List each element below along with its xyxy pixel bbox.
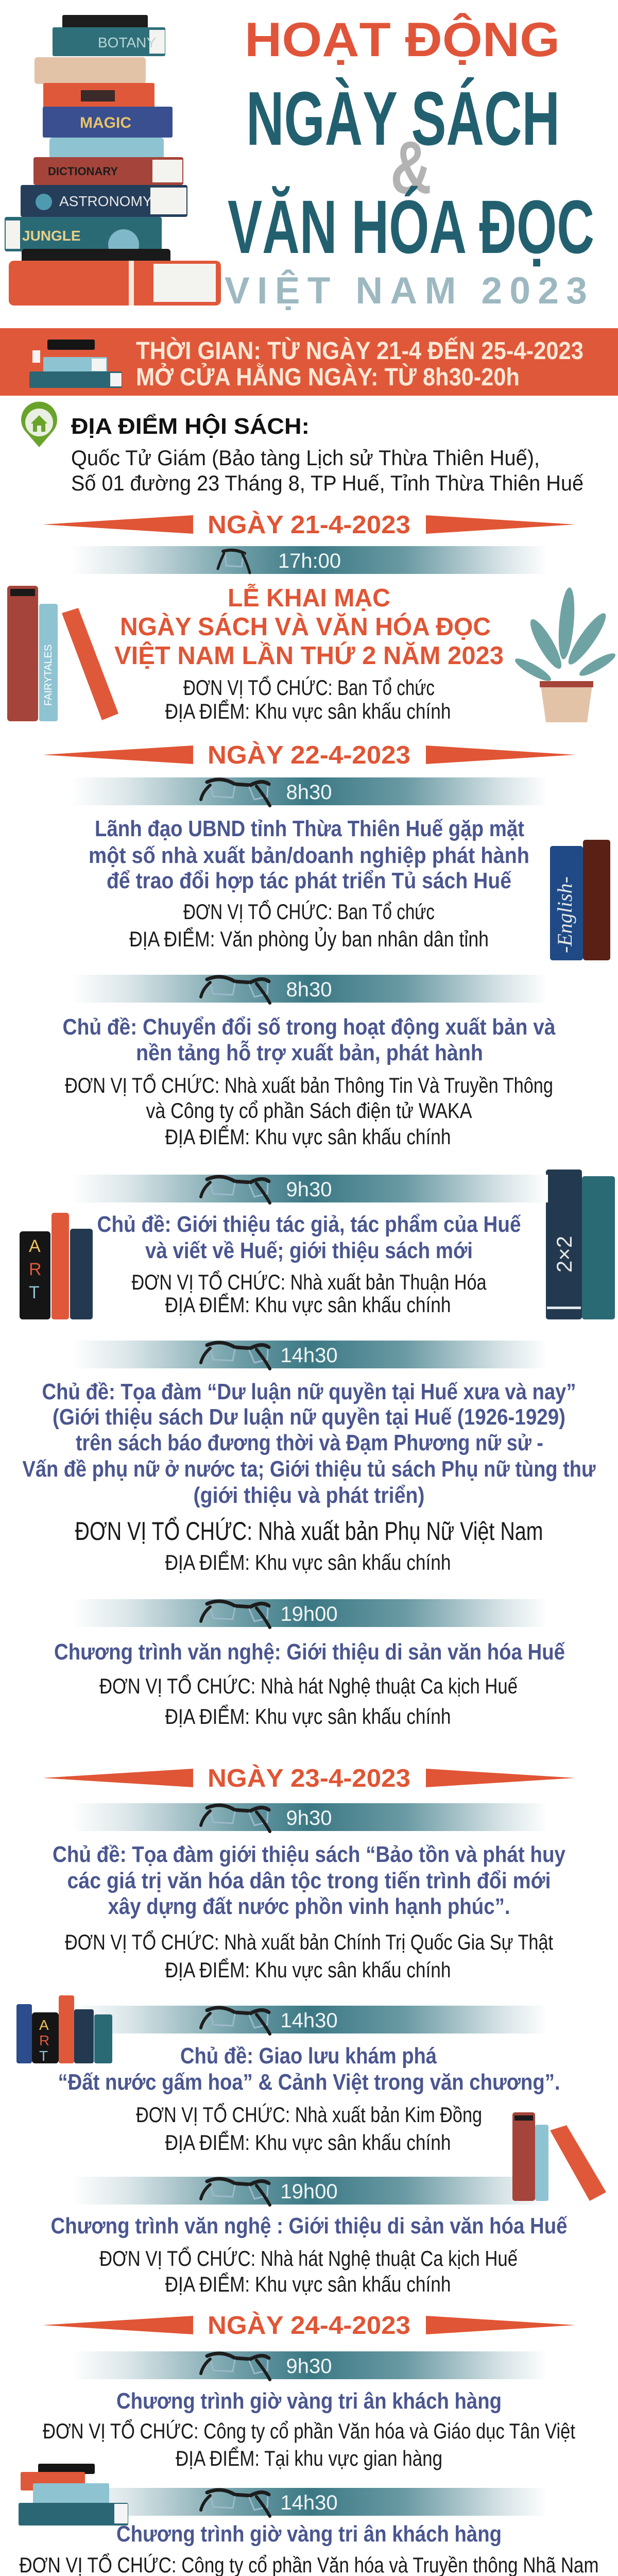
heading: opening ceremony: VIỆT NAM LẦN THỨ 2 NĂM 2023 [114,641,504,670]
illustration: books right 2x2 [546,1170,615,1319]
text: performance details [99,1673,518,1728]
text: opening details: ĐỊA ĐIỂM: Khu vực sân khấu chính [165,699,451,723]
text: opening details: ĐƠN VỊ TỔ CHỨC: Ban Tổ chức [183,674,435,700]
illustration: book stack header: MAGIC [80,114,131,131]
day banner: 21-4 [43,511,575,539]
heading: land of brocade: “Đất nước gấm hoa” & Cảnh Việt trong văn chương”. [58,2070,560,2095]
time bar: 14h30: 14h30 [280,2009,338,2032]
title: ampersand: & [390,126,432,209]
text: women's talk details [75,1516,543,1574]
time bar: 8h30 second [71,975,548,1003]
illustration: book stack header [5,15,221,306]
time bar: 19h00 [71,2177,548,2205]
illustration: books left (fairy tales): FAIRYTALES [43,645,54,706]
heading: venue: ĐỊA ĐIỂM HỘI SÁCH: [71,413,310,439]
text: meeting details [129,899,489,951]
day banner: 22-4: NGÀY 22-4-2023 [208,741,410,769]
heading: cultural values talk: các giá trị văn hóa dân tộc trong tiến trình đổi mới [67,1868,551,1893]
heading: land of brocade: Chủ đề: Giao lưu khám phá [180,2043,437,2069]
heading: digital transformation: nền tảng hỗ trợ xuất bản, phát hành [136,1040,483,1065]
text: Hue authors details: ĐƠN VỊ TỔ CHỨC: Nhà xuất bản Thuận Hóa [132,1269,487,1294]
day banner: 24-4: NGÀY 24-4-2023 [208,2312,410,2340]
illustration: book stack header: BOTANY [98,35,156,50]
time bar: 17h00 [71,546,548,574]
text: Hue authors details: ĐỊA ĐIỂM: Khu vực sân khấu chính [165,1292,451,1317]
illustration: ART books left: A [29,1236,41,1256]
text: meeting details: ĐƠN VỊ TỔ CHỨC: Ban Tổ chức [183,899,435,924]
time bar: 8h30: 8h30 [286,781,332,804]
illustration: fairytale books right [512,2112,606,2201]
text: address: Số 01 đường 23 Tháng 8, TP Huế, Tỉnh Thừa Thiên Huế [71,471,583,495]
day banner: 22-4 [43,741,575,769]
illustration: ART books row [16,1995,112,2064]
time bar: 9h30: 9h30 [286,1807,332,1829]
text: cultural values details: ĐỊA ĐIỂM: Khu vực sân khấu chính [165,1957,451,1982]
icon: small book stack [29,340,122,388]
text: land details [136,2102,482,2155]
illustration: ART books left: R [29,1260,42,1279]
text: performance details 23-4: ĐƠN VỊ TỔ CHỨC: Nhà hát Nghệ thuật Ca kịch Huế [99,2245,518,2270]
heading: leadership meeting: Lãnh đạo UBND tỉnh Thừa Thiên Huế gặp mặt [95,816,524,841]
text: digital details [65,1072,553,1149]
heading: golden hour 1: Chương trình giờ vàng tri ân khách hàng [116,2388,502,2414]
time bar: 17h00: 17h:00 [278,550,341,572]
day banner: 21-4: NGÀY 21-4-2023 [208,511,410,539]
heading: leadership meeting: một số nhà xuất bản/doanh nghiệp phát hành [89,843,529,868]
illustration: books left (fairy tales) [7,586,118,721]
heading: opening ceremony: NGÀY SÁCH VÀ VĂN HÓA ĐỌC [120,613,491,641]
text: opening details [165,674,451,723]
day banner: 23-4: NGÀY 23-4-2023 [208,1765,410,1792]
text: digital details: và Công ty cổ phần Sách điện tử WAKA [146,1098,472,1123]
time bar: 9h30 [71,1175,548,1203]
illustration: plant [512,587,618,722]
text: performance details: ĐƠN VỊ TỔ CHỨC: Nhà hát Nghệ thuật Ca kịch Huế [99,1673,518,1698]
illustration: English book: -English- [553,876,576,953]
heading: land of brocade [58,2043,560,2095]
text: women's talk details: ĐỊA ĐIỂM: Khu vực sân khấu chính [165,1550,451,1574]
heading: leadership meeting [89,816,529,893]
text: performance details 23-4: ĐỊA ĐIỂM: Khu vực sân khấu chính [165,2272,451,2296]
time bar: 9h30: 9h30 [286,2355,332,2378]
illustration: book stack header: JUNGLE [22,228,81,244]
text: opening hours: MỞ CỬA HẰNG NGÀY: TỪ 8h30-20h [136,363,520,391]
title: HOẠT ĐỘNG: HOẠT ĐỘNG [245,12,560,66]
time bar: 8h30 [71,777,548,806]
text: address [71,446,583,495]
time bar: 19h00: 19h00 [280,1603,338,1625]
heading: opening ceremony [114,584,504,670]
heading: cultural values talk: xây dựng đất nước phồn vinh hạnh phúc”. [108,1894,510,1919]
illustration: ART books left [20,1213,93,1319]
heading: Hue authors: Chủ đề: Giới thiệu tác giả, tác phẩm của Huế [97,1212,521,1237]
time bar: 8h30 second: 8h30 [286,978,332,1001]
illustration: flat book stack left [19,2464,128,2526]
time bar: 9h30 [71,1803,548,1832]
text: golden hour 1 details [43,2418,575,2470]
illustration: English book [550,840,610,960]
illustration: book stack header: DICTIONARY [48,165,118,178]
illustration: ART books left: T [29,1283,40,1302]
heading: women's rights talk: trên sách báo đương thời và Đạm Phương nữ sử - [76,1430,543,1455]
text: performance details: ĐỊA ĐIỂM: Khu vực sân khấu chính [165,1704,451,1728]
text: Hue authors details [132,1269,487,1317]
illustration: books right 2x2: 2×2 [552,1236,576,1273]
heading: digital transformation: Chủ đề: Chuyển đổi số trong hoạt động xuất bản và [63,1014,556,1040]
time bar: 9h30: 9h30 [286,1178,332,1201]
heading: cultural values talk [53,1842,565,1919]
time bar: 14h30 [71,1341,548,1369]
heading: Hue authors [97,1212,521,1263]
day banner: 24-4 [43,2312,575,2340]
icon: location pin [21,402,57,447]
heading: leadership meeting: để trao đổi hợp tác phát triển Tủ sách Huế [107,868,511,893]
illustration: book stack header: ASTRONOMY [59,193,152,209]
time bar: 19h00: 19h00 [280,2180,338,2203]
heading: women's rights talk [23,1379,596,1508]
time bar: 9h30 [71,2351,548,2380]
heading: digital transformation [63,1014,556,1065]
time bar: 14h30: 14h30 [280,2492,338,2514]
text: land details: ĐƠN VỊ TỔ CHỨC: Nhà xuất bản Kim Đồng [136,2102,482,2127]
heading: opening ceremony: LỄ KHAI MẠC [228,584,390,612]
heading: golden hour 2: Chương trình giờ vàng tri ân khách hàng [116,2521,502,2547]
title: VIỆT NAM 2023: VIỆT NAM 2023 [225,270,587,312]
text: address: Quốc Tử Giám (Bảo tàng Lịch sử Thừa Thiên Huế), [71,446,540,470]
panel: time band [0,328,618,396]
time bar: 14h30 [71,2006,548,2034]
time bar: 19h00 [71,1599,548,1628]
illustration: ART books row: R [39,2032,49,2048]
text: time: THỜI GIAN: TỪ NGÀY 21-4 ĐẾN 25-4-2023 [136,336,583,365]
text: digital details: ĐỊA ĐIỂM: Khu vực sân khấu chính [165,1124,451,1149]
time bar: 14h30: 14h30 [280,1344,338,1367]
text: meeting details: ĐỊA ĐIỂM: Văn phòng Ủy ban nhân dân tỉnh [129,926,489,951]
illustration: ART books row: A [39,2017,49,2033]
time bar: 14h30 [71,2488,548,2516]
text: land details: ĐỊA ĐIỂM: Khu vực sân khấu chính [165,2130,451,2155]
text: cultural values details [65,1929,553,1982]
text: performance details 23-4 [99,2245,518,2296]
heading: women's rights talk: (giới thiệu và phát triển) [194,1483,424,1508]
illustration: ART books row: T [39,2048,48,2064]
heading: Hue authors: và viết về Huế; giới thiệu sách mới [145,1238,473,1263]
text: golden hour 1 details: ĐỊA ĐIỂM: Tại khu vực gian hàng [176,2446,442,2470]
day banner: 23-4 [43,1765,575,1792]
